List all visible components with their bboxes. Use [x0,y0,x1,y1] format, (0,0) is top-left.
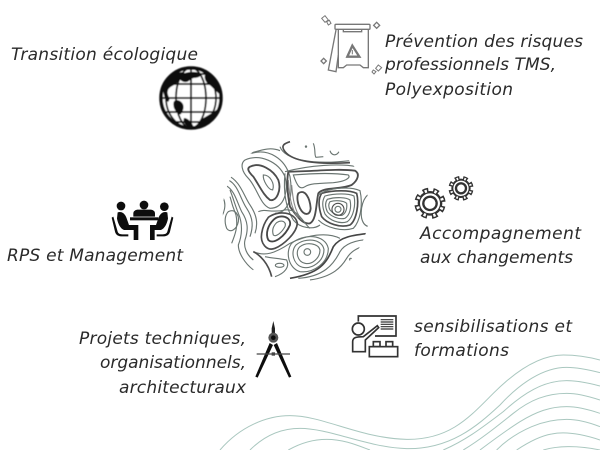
contour: upper-left summit [242,152,291,213]
icon: globe [160,66,222,130]
label: awareness and training: formations [414,341,509,361]
central topographic contour map [221,142,370,280]
label: RPS and management: RPS et Management [7,246,184,266]
label: awareness and training [414,317,573,361]
large gear [415,188,445,218]
contour: square spiral summit [318,188,370,230]
contour: bottom summit [253,233,370,280]
label: change support [419,224,582,268]
icon: trainer at a board [352,316,398,357]
contour: left flank [221,142,350,270]
label: technical projects: architecturaux [119,378,247,398]
label: risk prevention: professionnels TMS, [384,55,556,75]
globe grid and continents [162,68,220,128]
label: change support: Accompagnement [419,224,582,244]
label: technical projects [79,329,247,398]
icon: gears [415,177,473,218]
label: change support: aux changements [420,248,573,268]
icon: warning floor sign [321,16,382,74]
icon: drafting compass [255,321,291,378]
label: technical projects: organisationnels, [100,353,246,373]
label: technical projects: Projets techniques, [79,329,246,349]
label: risk prevention: Polyexposition [385,80,513,100]
contour: rounded ridge [284,165,358,228]
label: awareness and training: sensibilisations et [414,317,573,337]
label: risk prevention: Prévention des risques [385,32,583,52]
icon: meeting around a table [112,201,173,240]
label: risk prevention [384,32,583,100]
contour: lower-left summit [253,210,340,254]
small gear [449,177,473,200]
label: ecological transition: Transition écologique [11,45,198,65]
decorative waves bottom right [220,355,600,450]
